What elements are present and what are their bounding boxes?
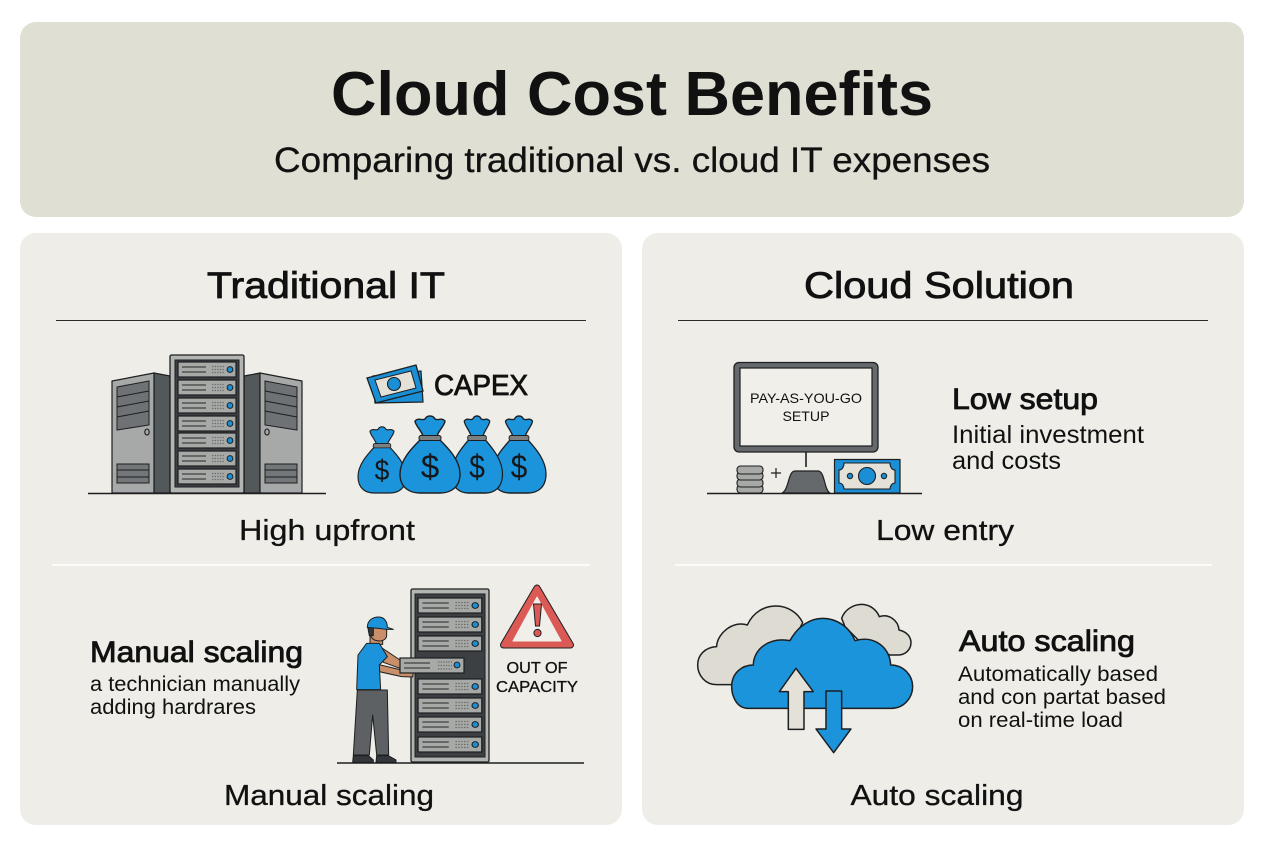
icon: technician at rack [337,589,584,763]
icon: server racks [88,355,326,494]
text block: auto scaling: and con partat based [958,686,1166,709]
subtitle: Comparing traditional vs. cloud IT expenses [274,141,990,180]
monitor text: PAY-AS-YOU-GO [750,390,862,406]
text block: low setup [952,383,1144,475]
label: CAPEX: CAPEX [434,370,528,402]
caption: high upfront: High upfront [239,515,415,547]
text block: manual scaling: a technician manually [90,673,301,696]
text block: auto scaling [958,625,1166,732]
caption: manual scaling: Manual scaling [224,780,434,812]
monitor text: SETUP [782,408,830,424]
text block: manual scaling: adding hardrares [90,696,256,719]
text block: auto scaling: on real-time load [958,709,1123,732]
icon: money bags [358,416,546,493]
caption: auto scaling: Auto scaling [850,780,1024,812]
icon: clouds with scaling arrows [698,604,913,753]
title: Cloud Cost Benefits [331,60,933,129]
heading: cloud solution: Cloud Solution [804,265,1074,306]
text block: manual scaling: Manual scaling [90,636,303,669]
icon: monitor setup [707,362,922,494]
caption: low entry: Low entry [876,515,1015,547]
text block: manual scaling [90,636,303,719]
monitor text [750,390,862,424]
label: out of capacity: OUT OF [506,660,568,677]
person [353,617,413,762]
heading: traditional IT: Traditional IT [207,265,445,306]
header panel [20,22,1244,217]
icon: banknotes [367,365,423,403]
panel: cloud solution [642,233,1244,825]
text block: low setup: and costs [952,447,1061,475]
panel: traditional IT [20,233,622,825]
label: out of capacity [496,660,578,696]
label: out of capacity: CAPACITY [496,679,578,696]
text block: auto scaling: Auto scaling [959,625,1135,658]
text block: low setup: Initial investment [952,421,1144,449]
icon: warning triangle [504,588,570,645]
text block: low setup: Low setup [952,383,1098,416]
text block: auto scaling: Automatically based [958,663,1158,686]
